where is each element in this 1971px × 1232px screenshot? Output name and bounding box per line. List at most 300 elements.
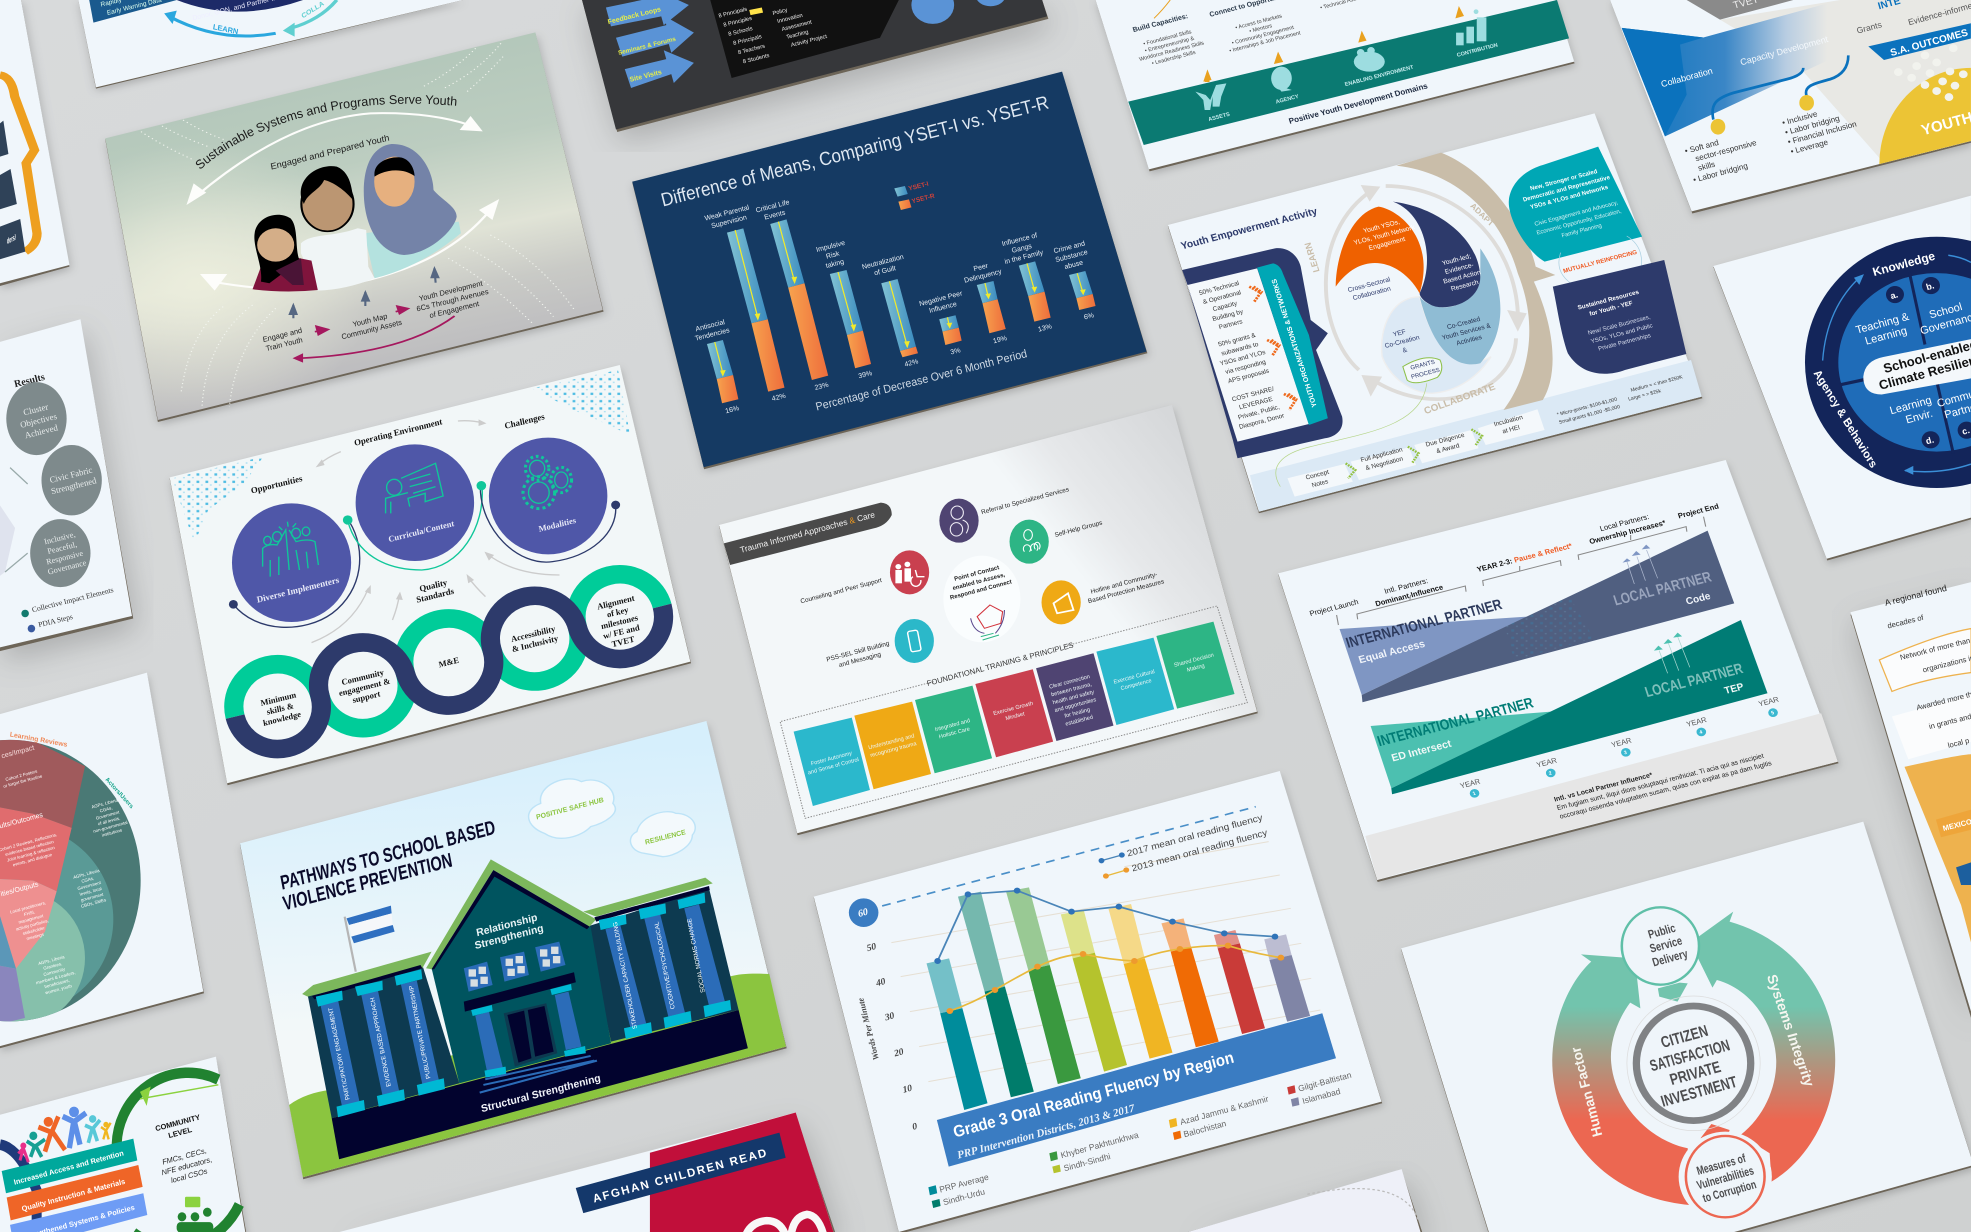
ribbon: quality standards rings: Community <box>341 667 385 687</box>
panel: Pathways to School Based Violence Prevention: SOCIAL NORMS CHANGE <box>686 917 707 993</box>
panel: Positive Youth Development Domains card: • Leadership Skills <box>1151 50 1197 67</box>
node: public service delivery: Service <box>1648 934 1684 956</box>
panel: Positive Youth Development Domains card: • Mentors <box>1249 23 1273 35</box>
circle: modalities: Modalities <box>538 515 577 534</box>
panel: chalkboard card: 8 Principles <box>723 16 753 29</box>
principle boxes: Clear connection <box>1049 674 1091 691</box>
panel: Pathways to School Based Violence Prevention: Strengthening <box>474 923 545 952</box>
node: measures of vulnerabilities: Vulnerabilities <box>1696 1165 1756 1193</box>
bar labels: Supervision <box>711 214 748 230</box>
panel: Positive Youth Development Domains card: CONTRIBUTION <box>1456 43 1499 59</box>
panel: Difference of Means bar chart card <box>632 72 1147 469</box>
domains band <box>1128 0 1569 145</box>
grey flow arrows <box>312 421 560 643</box>
panel: Positive Youth Development Domains card: • Foundational Skills <box>1143 29 1193 47</box>
panel: Results collective impact card: Achieved <box>24 422 59 440</box>
panel: Positive Youth Development Domains card <box>1095 0 1575 171</box>
axis: Words Per Minute <box>855 997 881 1061</box>
ribbon: quality standards rings: Alignment <box>596 592 635 612</box>
panel: impact pie chart card: Joint learning & reflection <box>6 845 56 863</box>
panel: impact pie chart card: AGPs, Liberia <box>91 797 119 809</box>
panel: Pathways to School Based Violence Prevention: COGNITIVE/PSYCHOLOGICAL <box>653 920 677 1010</box>
center contact point: enabled to Assess, <box>952 572 1006 592</box>
panel: Citizen Satisfaction cycle card: Systems Integrity <box>1764 973 1818 1088</box>
ribbon: quality standards rings: & Inclusivity <box>511 633 560 654</box>
node: measures of vulnerabilities <box>1679 1132 1772 1222</box>
teal outcome box: Family Planning <box>1561 223 1603 239</box>
panel: top right S.A. outcomes card: S.A. OUTCOMES <box>1889 28 1970 59</box>
circular diagram <box>1805 237 1971 488</box>
teal outcome box: New, Stronger or Scaled <box>1530 169 1599 192</box>
principle boxes: and opportunities <box>1054 697 1097 714</box>
foundational frame <box>780 606 1247 818</box>
title pill <box>724 503 892 565</box>
node: public service delivery <box>1622 907 1699 985</box>
circle: diverse implementers: Diverse Implementers <box>256 574 340 605</box>
panel: chalkboard card: Assessment <box>781 20 813 33</box>
panel: Pathways to School Based Violence Prevention <box>240 721 787 1179</box>
principle boxes: Understanding and <box>868 733 915 751</box>
panel: International vs Local Partner card: Project End <box>1677 501 1720 520</box>
ribbon: quality standards rings: support <box>352 688 381 705</box>
panel: impact pie chart card: AGPs, Liberia <box>38 954 66 966</box>
panel: Youth Empowerment Activity card: Youth Empowerment Activity <box>1180 206 1319 252</box>
region legend: Sindh-Urdu <box>942 1186 986 1207</box>
panel: impact pie chart card: Actors/Users <box>104 776 135 811</box>
center contact point <box>943 556 1020 642</box>
years: YEAR <box>1535 756 1558 769</box>
panel: impact pie chart card: of all levels, <box>97 816 121 826</box>
bar labels: Gangs <box>1011 243 1033 255</box>
panel: top right S.A. outcomes card: • Labor bridging <box>1692 161 1749 185</box>
node: public service delivery: Delivery <box>1651 947 1690 970</box>
center ring: PRIVATE <box>1668 1059 1723 1089</box>
panel: Results collective impact card: Inclusive, <box>43 530 76 546</box>
principle boxes: Holistic Care <box>938 726 971 740</box>
axis: 30 <box>883 1011 896 1024</box>
principle boxes: Competence <box>1120 678 1152 692</box>
panel: top blue LEARN card: COLLA <box>301 1 325 20</box>
panel: Pathways to School Based Violence Prevention: Relationship <box>476 912 538 939</box>
panel: Afghan Children Read card <box>339 1113 836 1232</box>
panel: chalkboard card <box>582 0 1048 132</box>
panel: top right S.A. outcomes card: • Inclusive <box>1781 109 1819 127</box>
bar labels: Influence <box>928 301 958 315</box>
icons: domain pictograms <box>1195 9 1486 110</box>
panel: International vs Local Partner card: Intl. Partners: <box>1383 576 1429 596</box>
panel: top right S.A. outcomes card: • Financial Inclusion <box>1787 120 1858 147</box>
bars <box>707 219 1096 403</box>
arrows: engagement loop <box>196 113 490 289</box>
panel: Trauma Informed Approaches card: and Messaging <box>838 651 882 669</box>
panel: International vs Local Partner card: YEAR 2-3: Pause & Reflect* <box>1476 541 1573 574</box>
brace panel: youth organizations: 50% grants & <box>1217 332 1257 348</box>
panel: far right regional foundation card: A regional found <box>1884 583 1948 608</box>
panel: impact pie chart card: Grantees, <box>43 961 63 971</box>
panel: Positive Youth Development Domains card: ASSETS <box>1208 112 1231 123</box>
clouds: RESILIENCE <box>645 829 687 847</box>
process steps: Concept <box>1305 469 1330 482</box>
brace panel: youth organizations: 50% Technical <box>1198 280 1240 297</box>
principle boxes: health and safety <box>1052 689 1095 706</box>
heading: Sustainable Systems: Sustainable Systems and Programs Serve Youth <box>196 95 456 169</box>
panel: top right S.A. outcomes card: • Soft and <box>1684 138 1720 156</box>
panel: impact pie chart card: stakeholder <box>22 925 46 936</box>
panel: Community level card: NFE educators, <box>161 1155 213 1177</box>
brace panel: youth organizations: COST SHARE/ <box>1231 386 1275 403</box>
navy resources box: YSOs, YLOs and Public <box>1590 323 1654 345</box>
panel: School-enabled Climate Resilience card: Knowledge <box>1871 249 1937 279</box>
panel: Sustainable Systems youth illustration: 6Cs Through Avenues <box>416 287 489 313</box>
node: measures of vulnerabilities: to Corruption <box>1701 1179 1758 1206</box>
panel: Pathways to School Based Violence Prevention: Structural Strengthening <box>480 1073 602 1115</box>
chart: TEP partner wedge: ED Intersect <box>1390 739 1453 764</box>
panel: Youth Empowerment Activity card: COLLABORATE <box>1423 381 1497 417</box>
panel: far right regional foundation card <box>1850 582 1971 1018</box>
panel: Grade 3 Oral Reading Fluency chart <box>814 771 1382 1232</box>
gridlines <box>891 842 1320 1082</box>
headings: Quality <box>419 577 449 594</box>
line legend <box>1099 812 1269 879</box>
process steps: & Award <box>1435 442 1461 455</box>
bar labels: Risk <box>825 250 841 261</box>
panel: chalkboard card: Feedback Loops <box>607 6 662 26</box>
grey cycle arrows <box>1326 186 1518 399</box>
panel: Youth Empowerment Activity card: Youth-led; <box>1441 253 1472 267</box>
headings: Challenges <box>504 411 546 431</box>
panel: Trauma Informed Approaches card <box>719 405 1258 835</box>
panel: Youth Empowerment Activity card: Engagement <box>1368 236 1406 252</box>
panel: impact pie chart card <box>0 673 204 1048</box>
timeline brackets <box>1337 517 1706 625</box>
panel: Positive Youth Development Domains card: Build Capacities: <box>1132 13 1189 34</box>
panel: Pathways to School Based Violence Prevention: VIOLENCE PREVENTION <box>281 849 454 915</box>
axis: 10 <box>902 1084 914 1096</box>
panel: Sustainable Systems youth illustration <box>104 32 608 426</box>
panel: top right S.A. outcomes card: sector-responsive <box>1694 138 1758 163</box>
teal outcome box: Civic Engagement and Advocacy, <box>1534 200 1619 228</box>
green hills <box>289 974 786 1177</box>
panel: Youth Empowerment Activity card: & <box>1402 347 1409 355</box>
chart: TEP partner wedge: INTERNATIONAL PARTNER <box>1375 695 1536 750</box>
center ring: SATISFACTION <box>1648 1037 1732 1075</box>
legend: YSET-I <box>908 181 930 193</box>
bar labels: taking <box>825 259 845 270</box>
panel: chalkboard card: Site Visits <box>629 69 663 84</box>
title pill: Trauma Informed Approaches & Care <box>739 509 876 555</box>
principle boxes: Making <box>1186 663 1205 674</box>
principle boxes: Mindset <box>1005 711 1026 722</box>
clouds <box>529 779 695 857</box>
panel: impact pie chart card: Local practitioners, <box>10 900 46 915</box>
clouds: POSITIVE SAFE HUB <box>536 797 604 821</box>
bar labels: Influence of <box>1001 232 1038 248</box>
bar labels: Weak Parental <box>704 204 750 223</box>
brace panel: youth organizations: YSOs and YLOs <box>1219 349 1266 368</box>
panel: Pathways to School Based Violence Prevention: PUBLIC/PRIVATE PARTNERSHIP <box>408 984 432 1080</box>
panel: School-enabled Climate Resilience card: Agency & Behaviors <box>1811 368 1879 471</box>
panel: School-enabled Climate Resilience card: a. <box>1889 289 1899 301</box>
bars by region <box>927 887 1310 1110</box>
bar labels <box>692 199 1095 415</box>
brace panel: youth organizations: APS proposals <box>1227 368 1270 385</box>
panel: School-enabled Climate Resilience card: b. <box>1925 280 1935 292</box>
panel: impact pie chart card: women, youth <box>45 983 73 995</box>
panel: Youth Empowerment Activity card: Youth YSOs, <box>1363 219 1401 235</box>
panel: impact pie chart card: management <box>18 913 45 925</box>
bar labels: Impulsive <box>816 240 846 254</box>
node: public service delivery: Public <box>1647 922 1677 942</box>
panel: Sustainable Systems youth illustration: Youth Map <box>352 311 388 329</box>
principle boxes: Exercise Growth <box>993 701 1034 717</box>
panel: Youth Empowerment Activity card: Research <box>1450 279 1480 293</box>
panel: chalkboard card: Policy <box>772 8 788 17</box>
panel: top blue LEARN card <box>78 0 463 89</box>
navy resources box: Sustained Resources <box>1577 289 1640 312</box>
principle boxes <box>794 622 1235 806</box>
panel: Positive Youth Development Domains card: Workforce Readiness Skills <box>1139 40 1205 63</box>
circle: modalities <box>489 438 607 554</box>
icon: colourful people <box>18 1107 111 1162</box>
navy resources box: for Youth - YEF <box>1589 300 1634 318</box>
bar labels: Delinquency <box>964 268 1003 285</box>
panel: chalkboard card: 8 Teachers <box>738 44 766 56</box>
panel: Sustainable Systems youth illustration: Engaged and Prepared Youth <box>270 132 390 172</box>
panel: Trauma Informed Approaches card: Counseling and Peer Support <box>800 577 883 605</box>
panel: Sustainable Systems youth illustration: of Engagement <box>429 299 481 320</box>
panel: Afghan Children Read card: AFGHAN CHILDREN READ <box>592 1147 769 1205</box>
panel: Results collective impact card: Results <box>13 372 46 390</box>
panel: impact pie chart card: Government <box>95 809 121 821</box>
panel: top right S.A. outcomes card: • Leverage <box>1789 137 1830 156</box>
bar labels: Antisocial <box>695 319 726 333</box>
panel: Sustainable Systems youth illustration: Engage and <box>262 326 303 344</box>
principle boxes: and Sense of Control <box>807 757 860 776</box>
heading: Difference of Means, Comparing YSET-I vs. YSET-R <box>659 92 1051 212</box>
illustration: three youth figures <box>253 144 461 291</box>
panel: International vs Local Partner card: Ownership Increases* <box>1588 518 1667 546</box>
heading: PATHWAYS TO SCHOOL BASED <box>279 817 497 895</box>
circle: diverse implementers <box>232 503 351 622</box>
panel: impact pie chart card: FHSL <box>23 909 36 917</box>
panel: Trauma Informed Approaches card: Referral to Specialized Services <box>981 486 1070 516</box>
tan adapt arc <box>1396 153 1555 410</box>
process steps: Due Diligence <box>1425 432 1466 449</box>
bar labels: Substance <box>1055 249 1089 264</box>
bar labels: Events <box>764 209 787 222</box>
region legend: Sindh-Sindhi <box>1063 1151 1112 1173</box>
legend: YSET-R <box>911 193 936 205</box>
panel: impact pie chart card: Cohort 2 Reviews, Reflections, <box>0 832 58 852</box>
panel: Youth Empowerment Activity card: MUTUALLY REINFORCING <box>1563 250 1638 275</box>
panel: Results collective impact card: Governance <box>47 558 88 577</box>
footer text: Em fugiam sunt, iliqui diore soluptaqui renihiciat. Ti acia qui as niscipiet <box>1556 753 1765 812</box>
brace panel: youth organizations: Building by <box>1212 308 1245 323</box>
panel: chalkboard card: 8 Principals <box>733 34 763 47</box>
principle boxes: between trauma, <box>1051 682 1093 698</box>
region legend: PRP Average <box>938 1172 990 1195</box>
grants process badge <box>1403 358 1442 383</box>
panel: impact pie chart card: AGPs, Liberia <box>73 868 101 880</box>
footer text: Intl. vs Local Partner Influence* <box>1553 772 1654 804</box>
axis: 50 <box>866 942 878 954</box>
bar labels: Peer <box>973 262 990 273</box>
panel: School-enabled Climate Resilience card: Learning <box>1888 395 1933 417</box>
headings: Standards <box>415 586 455 605</box>
cycle arrows <box>1552 912 1835 1205</box>
panel: Youth Empowerment Activity card: YEF <box>1392 329 1407 339</box>
bar labels: 23% <box>814 382 829 392</box>
teal outcome box: YSOs & YLOs and Networks <box>1530 185 1610 211</box>
panel: impact pie chart card: Cohort 2 Fosters <box>5 768 38 782</box>
chart: code partner wedge: Code <box>1685 591 1713 608</box>
principle boxes: Exercise Cultural <box>1113 669 1155 686</box>
panel: School-enabled Climate Resilience card: Learning <box>1864 325 1908 348</box>
panel: Youth Empowerment Activity card <box>1168 113 1702 513</box>
building <box>302 859 748 1159</box>
panel: chalkboard card: Seminars & Forums <box>617 36 677 57</box>
panel: far right regional foundation card: decades of <box>1886 613 1925 630</box>
axis caption: Percentage of Decrease Over 6 Month Period <box>815 348 1028 414</box>
flag <box>345 906 395 972</box>
navy resources box: New/ Scale Businesses, <box>1587 315 1652 337</box>
panel: impact pie chart card: or forgot the Routine <box>3 773 43 789</box>
grants process badge: PROCESS <box>1411 368 1441 381</box>
panel: International vs Local Partner card: Local Partners: <box>1599 512 1650 533</box>
foundational frame: FOUNDATIONAL TRAINING & PRINCIPLES <box>926 640 1074 688</box>
bar labels: abuse <box>1064 260 1084 271</box>
panel: chalkboard card: 8 Students <box>742 53 770 65</box>
process steps: * Micro-grants: $100-$1,000 <box>1556 397 1618 418</box>
years: YEAR <box>1459 777 1482 790</box>
panel: Youth Empowerment Activity card: ADAPT <box>1469 201 1495 228</box>
panel: chalkboard card: Innovation <box>777 13 803 25</box>
panel: Youth Empowerment Activity card: Evidence- <box>1444 262 1475 276</box>
panel: School-enabled Climate Resilience card: Envir. <box>1904 408 1934 426</box>
panel: top right S.A. outcomes card: Grants <box>1855 19 1883 36</box>
panel: Results collective impact card: Collective Impact Elements <box>31 585 114 614</box>
icon circles <box>890 499 1081 663</box>
panel: Positive Youth Development Domains card: • Entrepreneurship & <box>1144 36 1195 54</box>
brace panel: youth organizations: & Operational <box>1202 289 1242 306</box>
swirl diagram <box>1336 202 1500 393</box>
legend <box>894 181 936 210</box>
title banner: Grade 3 Oral Reading Fluency by Region <box>951 1049 1236 1142</box>
panel: far right regional foundation card: local p <box>1947 736 1970 750</box>
panel: Positive Youth Development Domains card: • Internships & Job Placement <box>1229 30 1302 54</box>
brace panel: youth organizations: subawards to <box>1220 341 1260 357</box>
panel: bottom pale lavender card <box>1188 1169 1423 1232</box>
panel: impact pie chart card: government <box>80 892 105 903</box>
target badge 60 <box>849 898 878 927</box>
circle: curricula content: Curricula/Content <box>387 518 455 544</box>
ribbon: quality standards rings: w/ FE and <box>602 622 641 641</box>
panel: Trauma Informed Approaches card: Hotline and Community- <box>1090 571 1158 596</box>
panel: partial card with orange brace <box>0 0 69 286</box>
process steps <box>1287 374 1687 497</box>
bar labels: 3% <box>950 347 961 356</box>
region legend <box>928 1070 1353 1208</box>
panel: top right S.A. outcomes card <box>1610 0 1971 218</box>
panel: School-enabled Climate Resilience card: d. <box>1925 435 1935 446</box>
panel: Results collective impact card: Cluster <box>22 401 49 417</box>
years: 2 <box>1548 770 1553 777</box>
years: YEAR <box>1685 715 1708 729</box>
banners: Increased Access and Retention <box>13 1148 125 1187</box>
axis: 0 <box>911 1122 919 1133</box>
brace panel: youth organizations: YOUTH ORGANIZATIONS & NETWORKS <box>1271 278 1319 408</box>
panel: impact pie chart card: CBOs, SMEs <box>80 897 107 909</box>
principle boxes: established <box>1065 715 1094 728</box>
panel: School-enabled Climate Resilience card <box>1713 196 1971 560</box>
panel: Sustainable Systems youth illustration: Youth Development <box>418 278 484 303</box>
panel: Results collective impact card: Peaceful, <box>46 540 78 556</box>
ribbon: quality standards rings: Accessibility <box>510 623 557 644</box>
ribbon: quality standards rings: milestones <box>600 612 639 631</box>
panel: Community level card: LEVEL <box>167 1125 193 1140</box>
process steps: Notes <box>1311 478 1329 489</box>
process steps: Full Application <box>1360 446 1404 464</box>
panel: top right S.A. outcomes card: Collaboration <box>1660 66 1714 89</box>
title banner: PRP Intervention Districts, 2013 & 2017 <box>956 1102 1136 1162</box>
bar labels: 19% <box>992 335 1008 345</box>
process steps: Large = > $25k <box>1628 388 1662 403</box>
navy resources box <box>1553 260 1686 374</box>
panel: impact pie chart card: members & Leaders, <box>35 970 76 985</box>
panel: impact pie chart card: activity portfolios, <box>15 918 49 932</box>
panel: impact pie chart card: CGAs, <box>99 805 113 813</box>
center contact point: Point of Contact <box>954 565 1000 583</box>
title banner <box>937 1013 1336 1167</box>
brace panel: youth organizations: LEVERAGE <box>1238 396 1274 411</box>
panel: Citizen Satisfaction cycle card <box>1401 822 1971 1232</box>
process steps: Incubation <box>1493 414 1524 428</box>
panel: Youth Empowerment Activity card: Based Action <box>1442 269 1482 286</box>
panel: School-enabled Climate Resilience card: c. <box>1961 425 1971 437</box>
panel: Positive Youth Development Domains card: • Community Engagement <box>1231 25 1295 47</box>
years: 4 <box>1699 729 1703 736</box>
teal outcome box: Democratic and Representative <box>1522 175 1612 204</box>
years: YEAR <box>1757 695 1780 708</box>
bar labels: 42% <box>771 393 786 403</box>
brace panel: youth organizations: via responding <box>1225 359 1267 376</box>
panel: top right S.A. outcomes card: • Labor bridging <box>1784 114 1841 137</box>
axis: 40 <box>874 977 887 989</box>
headings: Opportunities <box>250 473 304 496</box>
panel: Youth Empowerment Activity card: Activities <box>1456 334 1484 347</box>
panel: Youth Empowerment Activity card: Cross-Sectoral <box>1347 276 1392 294</box>
ribbon: quality standards rings: TVET <box>611 634 636 649</box>
panel: Sustainable Systems youth illustration: Community Assets <box>341 318 403 341</box>
panel: Positive Youth Development Domains card: ENABLING ENVIRONMENT <box>1344 65 1415 88</box>
panel: Sustainable Systems youth illustration: Train Youth <box>265 335 303 353</box>
axis: 20 <box>892 1047 905 1060</box>
panel: Results collective impact card: Objectives <box>19 411 58 430</box>
icon: community people <box>177 1197 213 1232</box>
panel: chalkboard card: Activity Project <box>790 34 828 49</box>
panel: partial card with orange brace: ders! <box>6 233 17 246</box>
panel: top blue LEARN card: LEARN <box>212 22 239 36</box>
panel: impact pie chart card: ults/Outcomes <box>0 812 44 830</box>
panel: Results collective impact card: Civic Fabric <box>49 465 93 485</box>
panel: Opportunities and Quality Standards ring card <box>170 365 691 785</box>
panel: impact pie chart card: events, and dialogue <box>12 852 53 867</box>
panel: chalkboard card: 8 Principals <box>718 7 748 20</box>
panel: top right S.A. outcomes card: skills <box>1697 160 1716 173</box>
panel: Youth Empowerment Activity card: YLOs, Youth Network <box>1353 224 1416 247</box>
bar labels: 39% <box>858 370 873 380</box>
ribbon: quality standards rings: engagement & <box>338 676 391 698</box>
